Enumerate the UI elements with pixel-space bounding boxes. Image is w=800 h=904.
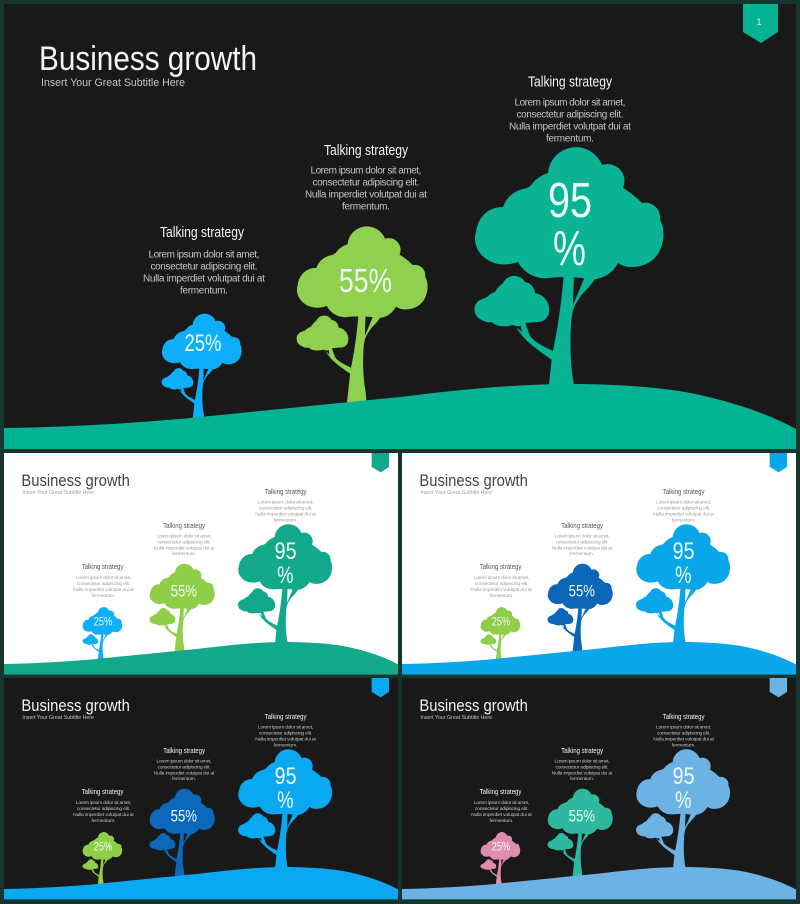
panel: main dark slide [4,4,796,449]
tree: small 25% [162,314,242,426]
text block: medium tree: Nulla imperdiet volutpat dui at [552,770,613,776]
text block: large tree: fermentum. [274,742,298,748]
text block: small tree: Talking strategy [82,787,124,796]
tree: large 95% [238,524,332,656]
value: 95%: 95 [275,538,297,565]
text block: large tree: Talking strategy [663,712,705,721]
value: 95% [275,538,297,589]
text block: medium tree: Lorem ipsum dolor sit amet, [156,533,212,539]
text block: large tree: Lorem ipsum dolor sit amet, [514,98,626,108]
tree: medium 55% [150,564,215,655]
text block: medium tree: Nulla imperdiet volutpat dui at [154,770,215,776]
text block: medium tree: consectetur adipiscing elit. [555,539,609,545]
text block: large tree: consectetur adipiscing elit. [259,505,312,511]
text block: large tree: Nulla imperdiet volutpat dui at [255,511,316,517]
title: Business growth [21,696,130,715]
text block: large tree: Lorem ipsum dolor sit amet, [656,724,711,730]
text block: large tree: Lorem ipsum dolor sit amet, [258,724,313,730]
value: 25%: 25% [184,330,222,357]
text block: small tree: Nulla imperdiet volutpat dui at [73,812,134,818]
text block: large tree: Talking strategy [663,487,705,496]
subtitle: Insert Your Great Subtitle Here [22,490,94,496]
text block: small tree: Lorem ipsum dolor sit amet, [474,575,529,581]
text block: small tree [143,225,265,296]
text block: small tree: consectetur adipiscing elit. [77,806,130,812]
text block: medium tree: Talking strategy [163,746,205,755]
panel: white slide blue [402,453,796,674]
text block: medium tree: Talking strategy [163,521,205,530]
text block: large tree: Nulla imperdiet volutpat dui at [653,736,714,742]
tree: small 25% [82,607,122,663]
text block: large tree: fermentum. [672,742,696,748]
text block: small tree: Talking strategy [480,787,522,796]
text block: large tree [255,712,316,748]
text block: medium tree: consectetur adipiscing elit. [312,178,420,188]
tree: large 95% [238,749,332,881]
text block: small tree: fermentum. [92,593,115,599]
text block: large tree: Nulla imperdiet volutpat dui at [255,736,316,742]
text block: small tree: Talking strategy [82,562,124,571]
text block: medium tree: Lorem ipsum dolor sit amet, [554,533,610,539]
text block: large tree: consectetur adipiscing elit. [259,730,312,736]
text block: medium tree: Talking strategy [324,143,409,159]
text block: small tree: Nulla imperdiet volutpat dui at [143,274,265,284]
text block: medium tree [154,746,215,782]
tree: medium 55% [297,226,428,410]
value: 55%: 55% [569,807,595,825]
text block: small tree: Nulla imperdiet volutpat dui at [73,587,134,593]
text block: medium tree: fermentum. [172,551,196,557]
panel: white slide green [4,453,398,674]
text block: small tree: fermentum. [490,593,513,599]
page tab: 1 [756,17,762,27]
text block: medium tree: Lorem ipsum dolor sit amet, [310,166,422,176]
hill [4,867,398,899]
text block: medium tree: consectetur adipiscing elit. [157,764,211,770]
text block: large tree: Lorem ipsum dolor sit amet, [656,499,711,505]
value: 95% [548,174,592,276]
text block: large tree [653,712,714,748]
value: 95%: 95 [673,538,695,565]
value: 95% [673,763,695,814]
value: 95% [673,538,695,589]
panel: dark slide pastel [402,678,796,899]
tree: large 95% [474,147,664,412]
hill [402,642,796,674]
text block: small tree: Lorem ipsum dolor sit amet, [474,800,529,806]
text block: large tree: Talking strategy [265,712,307,721]
text block: medium tree: Lorem ipsum dolor sit amet, [156,758,212,764]
value: 25%: 25% [94,840,112,854]
text block: small tree [471,787,532,824]
text block: medium tree: Nulla imperdiet volutpat dui at [154,545,215,551]
text block: small tree: Lorem ipsum dolor sit amet, [148,250,260,260]
text block: large tree: Nulla imperdiet volutpat dui at [653,511,714,517]
text block: medium tree: Nulla imperdiet volutpat dui at [552,545,613,551]
text block: small tree: Lorem ipsum dolor sit amet, [76,575,131,581]
page tab [743,4,778,43]
text block: medium tree [305,143,427,212]
value: 95%: % [675,562,692,589]
value: 95%: % [675,787,692,814]
text block: large tree: Lorem ipsum dolor sit amet, [258,499,313,505]
tree: small 25% [480,832,520,888]
value: 95%: % [277,562,294,589]
hill [4,642,398,674]
value: 25%: 25% [492,840,510,854]
text block: large tree: fermentum. [546,134,594,144]
text block: small tree: fermentum. [92,818,115,824]
text block: large tree: Nulla imperdiet volutpat dui at [509,122,631,132]
subtitle: Insert Your Great Subtitle Here [22,715,94,721]
text block: medium tree: Talking strategy [561,521,603,530]
panel: dark slide blue [4,678,398,899]
text block: medium tree: Lorem ipsum dolor sit amet, [554,758,610,764]
tree: small 25% [82,832,122,888]
text block: medium tree: Nulla imperdiet volutpat dui at [305,190,427,200]
text block: small tree: consectetur adipiscing elit. [475,581,528,587]
value: 95%: 95 [673,763,695,790]
value: 95%: 95 [548,174,592,228]
title: Business growth [21,471,130,490]
value: 55%: 55% [569,582,595,600]
text block: medium tree: fermentum. [342,202,390,212]
subtitle: Insert Your Great Subtitle Here [420,490,492,496]
text block: large tree: fermentum. [274,517,298,523]
text block: small tree: consectetur adipiscing elit. [77,581,130,587]
text block: medium tree: consectetur adipiscing elit. [555,764,609,770]
text block: small tree: consectetur adipiscing elit. [150,262,258,272]
text block: small tree [471,562,532,599]
text block: medium tree: fermentum. [570,776,594,782]
value: 55%: 55% [171,807,197,825]
title: Business growth [419,471,528,490]
text block: medium tree: fermentum. [172,776,196,782]
text block: medium tree [552,746,613,782]
page tab [372,678,389,697]
text block: large tree [509,74,631,144]
value: 25%: 25% [492,615,510,629]
text block: large tree [255,487,316,523]
value: 95%: 95 [275,763,297,790]
value: 55%: 55% [339,262,392,299]
text block: medium tree [552,521,613,557]
value: 95% [275,763,297,814]
tree: small 25% [480,607,520,663]
tree: medium 55% [548,789,613,880]
text block: large tree: Talking strategy [265,487,307,496]
text block: large tree: consectetur adipiscing elit. [657,505,710,511]
page tab [372,453,389,472]
tree: large 95% [636,749,730,881]
title: Business growth [39,40,257,78]
tree: medium 55% [150,789,215,880]
text block: small tree [73,787,134,824]
text block: small tree: fermentum. [490,818,513,824]
text block: medium tree: fermentum. [570,551,594,557]
page tab [770,453,787,472]
subtitle: Insert Your Great Subtitle Here [41,77,185,89]
text block: small tree: Talking strategy [480,562,522,571]
text block: small tree: Nulla imperdiet volutpat dui at [471,812,532,818]
text block: large tree: Talking strategy [528,74,613,90]
tree: large 95% [636,524,730,656]
subtitle: Insert Your Great Subtitle Here [420,715,492,721]
text block: small tree: Talking strategy [160,225,245,241]
value: 95%: % [553,222,586,276]
tree: medium 55% [548,564,613,655]
text block: small tree: consectetur adipiscing elit. [475,806,528,812]
page tab [770,678,787,697]
text block: large tree: consectetur adipiscing elit. [516,110,624,120]
text block: small tree: Nulla imperdiet volutpat dui at [471,587,532,593]
text block: medium tree [154,521,215,557]
value: 25%: 25% [94,615,112,629]
text block: small tree: fermentum. [180,286,228,296]
text block: small tree [73,562,134,599]
title: Business growth [419,696,528,715]
text block: large tree: consectetur adipiscing elit. [657,730,710,736]
text block: small tree: Lorem ipsum dolor sit amet, [76,800,131,806]
text block: medium tree: Talking strategy [561,746,603,755]
hill [402,867,796,899]
text block: large tree [653,487,714,523]
value: 55%: 55% [171,582,197,600]
value: 95%: % [277,787,294,814]
text block: large tree: fermentum. [672,517,696,523]
hill [4,384,796,449]
text block: medium tree: consectetur adipiscing elit. [157,539,211,545]
